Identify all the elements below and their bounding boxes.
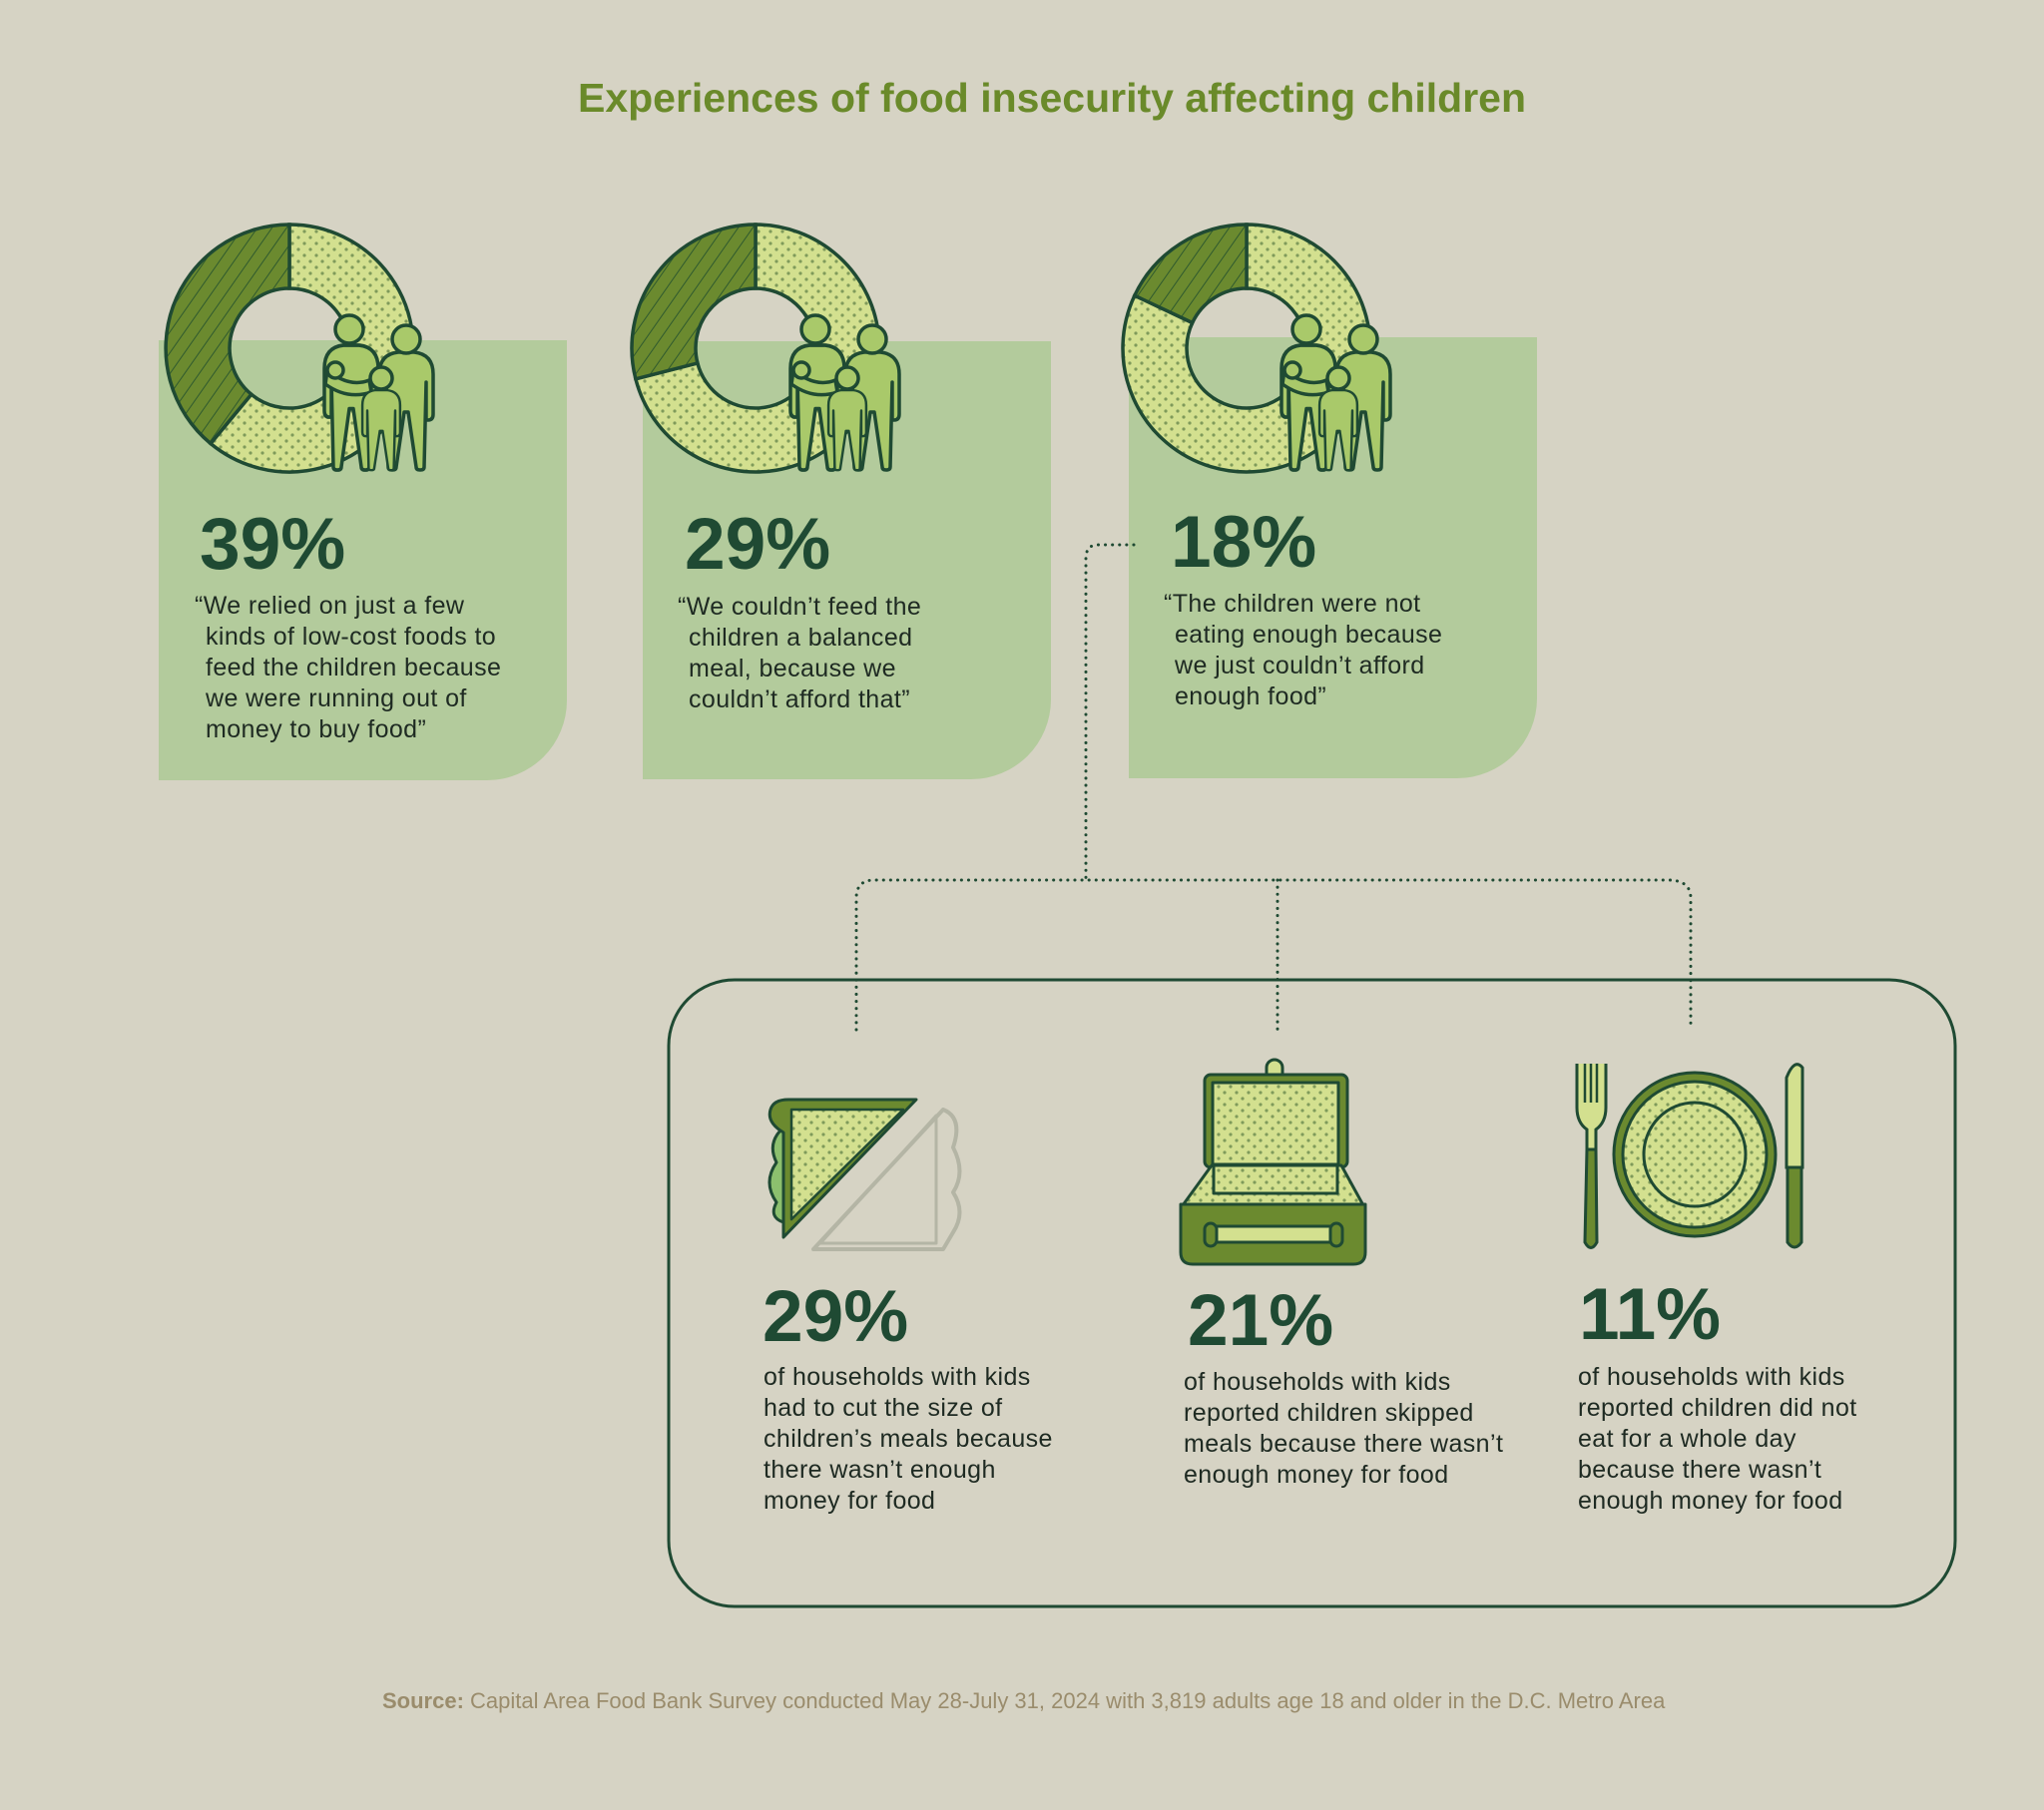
stat: 39%: 39%: [200, 504, 345, 585]
text: 21%: meals because there wasn’t: [1184, 1430, 1503, 1458]
text: 21%: of households with kids: [1184, 1368, 1451, 1396]
quote: 18%: enough food”: [1175, 682, 1326, 710]
text: 11%: because there wasn’t: [1578, 1456, 1821, 1484]
quote: 39%: we were running out of: [206, 684, 467, 712]
text: 29%: had to cut the size of: [764, 1394, 1003, 1422]
donut chart: 29%: [632, 225, 899, 472]
quote: 29%: meal, because we: [689, 655, 896, 682]
text: 21%: reported children skipped: [1184, 1399, 1474, 1427]
stat: 29% cut meal size: 29%: [763, 1276, 908, 1357]
text: 11%: eat for a whole day: [1578, 1425, 1796, 1453]
quote: 29%: “We couldn’t feed the: [678, 593, 921, 621]
stat: 21% skipped meals: 21%: [1188, 1280, 1333, 1361]
title: Experiences of food insecurity affecting children: [578, 75, 1526, 121]
text: 11%: [1578, 1363, 1857, 1515]
stat: 11% whole day: 11%: [1579, 1274, 1721, 1355]
text: 11%: of households with kids: [1578, 1363, 1845, 1391]
panel: 29%: [643, 341, 1051, 779]
quote: 18%: [1164, 590, 1442, 710]
donut chart: 39%: [166, 225, 433, 472]
text: 29%: money for food: [764, 1487, 935, 1515]
quote: 39%: “We relied on just a few: [195, 592, 464, 620]
quote: 39%: feed the children because: [206, 654, 501, 681]
quote: 39%: [195, 592, 501, 743]
stat: 29%: 29%: [685, 504, 830, 585]
dotted connector: [856, 545, 1691, 1030]
source: Source: Capital Area Food Bank Survey conducted May 28-July 31, 2024 with 3,819 adults age 18 and older in the D.C. Metro Area: [382, 1688, 1665, 1713]
panel: 39%: [159, 340, 567, 780]
text: 29%: there wasn’t enough: [764, 1456, 996, 1484]
quote: 18%: eating enough because: [1175, 621, 1442, 649]
text: 21%: enough money for food: [1184, 1461, 1449, 1489]
icon: lunchbox: [1181, 1060, 1365, 1264]
icon: sandwich: [769, 1100, 960, 1249]
quote: 29%: children a balanced: [689, 624, 912, 652]
text: 29%: [764, 1363, 1053, 1515]
quote: 29%: couldn’t afford that”: [689, 685, 910, 713]
quote: 29%: [678, 593, 921, 713]
bottom box: [669, 980, 1955, 1606]
panel: 18%: [1129, 337, 1537, 778]
text: 21%: [1184, 1368, 1503, 1489]
text: 11%: enough money for food: [1578, 1487, 1843, 1515]
text: 11%: reported children did not: [1578, 1394, 1857, 1422]
quote: 39%: money to buy food”: [206, 715, 426, 743]
stat: 18%: 18%: [1171, 502, 1316, 583]
quote: 39%: kinds of low-cost foods to: [206, 623, 496, 651]
text: 29%: children’s meals because: [764, 1425, 1053, 1453]
text: 29%: of households with kids: [764, 1363, 1031, 1391]
quote: 18%: “The children were not: [1164, 590, 1421, 618]
donut chart: 18%: [1123, 225, 1390, 472]
quote: 18%: we just couldn’t afford: [1175, 652, 1425, 679]
icon: plate and cutlery: [1577, 1064, 1802, 1247]
